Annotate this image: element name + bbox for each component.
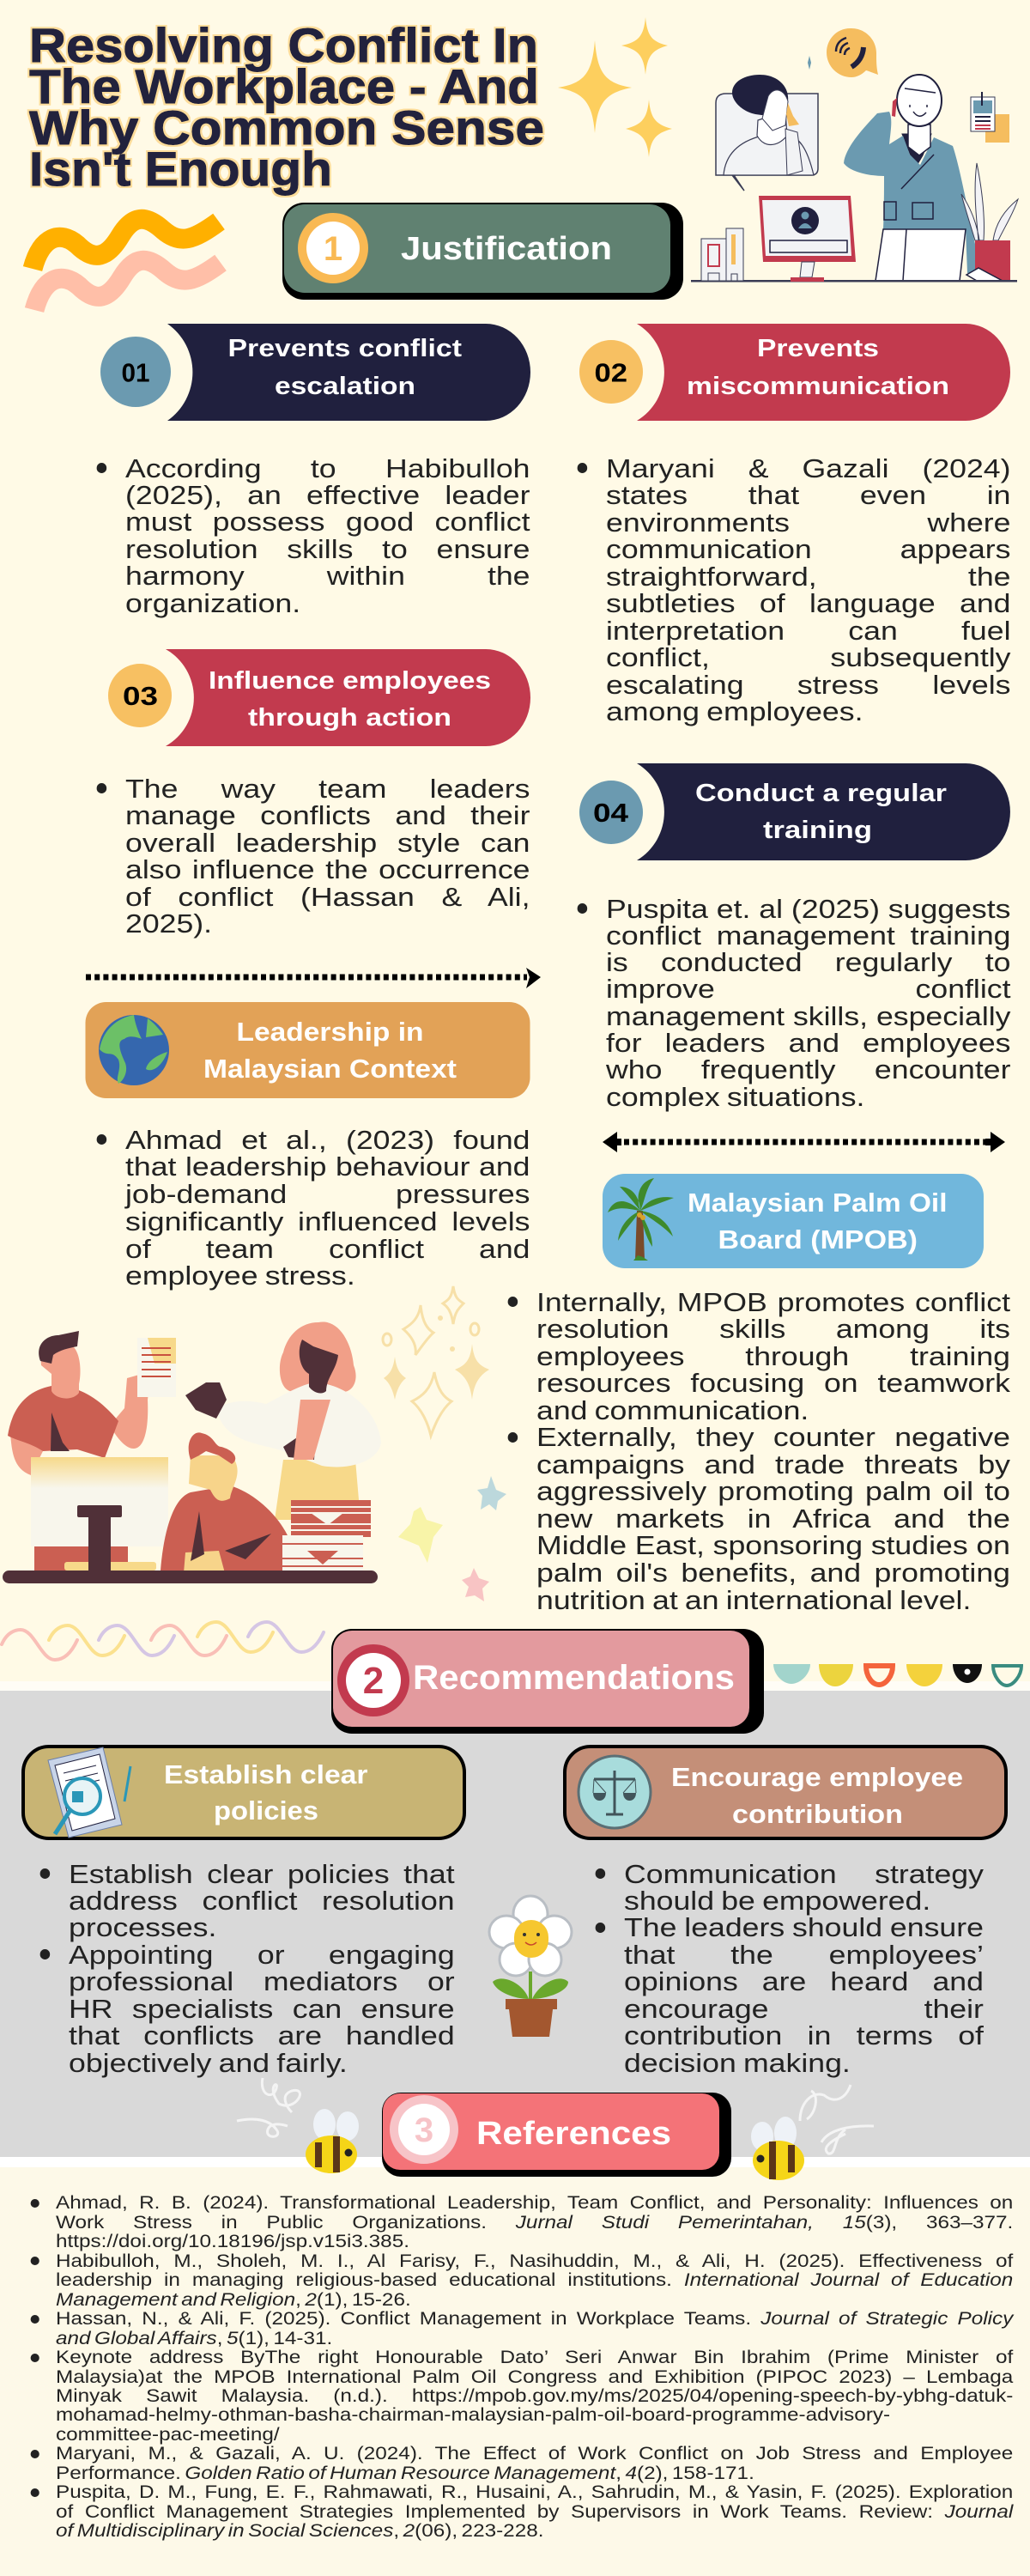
text: MPOB bullets: Externally, they counter negative — [536, 1422, 1010, 1452]
section button: Recommendations — [331, 1629, 764, 1734]
text: MPOB bullets: resources focusing on teamwork — [536, 1368, 1010, 1398]
text: MPOB bullets: employees through training — [536, 1341, 1010, 1371]
text: policies bullets: objectively and fairly. — [69, 2048, 348, 2078]
text: MPOB bullets: palm oil's benefits, and promoting — [536, 1558, 1010, 1588]
text: policies bullets: professional mediators or — [69, 1966, 455, 1996]
text: contribution bullets: contribution in terms of — [624, 2020, 984, 2050]
section button: References — [382, 2093, 731, 2177]
icon: number 3 badge — [390, 2095, 458, 2164]
text: contribution bullets: The leaders should ensure — [624, 1912, 984, 1942]
text: escalation bullet: According to Habibulloh — [125, 453, 530, 483]
text: MPOB bullets: resolution skills among its — [536, 1314, 1010, 1344]
text: training bullet: Puspita et. al (2025) suggests — [606, 893, 1010, 924]
arrow: dotted right arrow — [86, 968, 541, 988]
icon: potted plant — [961, 163, 1018, 281]
panel: Encourage employee contribution: contribution — [732, 1799, 903, 1829]
text: MPOB bullets — [508, 1286, 1010, 1615]
icon: orange and pink squiggles — [33, 219, 221, 310]
text: miscommunication bullet: interpretation can fuel — [606, 615, 1010, 646]
text: training bullet: who frequently encounter — [606, 1054, 1010, 1084]
panel: Malaysian Palm Oil Board: Board (MPOB) — [718, 1224, 918, 1255]
text: escalation bullet: organization. — [125, 588, 300, 618]
pill: 01 Prevents conflict escalation: escalation — [275, 373, 415, 400]
text: reference list: and Global Affairs, 5(1), 14-31. — [56, 2328, 332, 2348]
text: miscommunication bullet: communication appears — [606, 534, 1010, 564]
text: reference list: leadership in managing religious-based educational institutions. International Journal of Education — [56, 2269, 1013, 2290]
text: contribution bullets: decision making. — [624, 2048, 851, 2078]
icon: palm tree — [608, 1178, 674, 1261]
text: reference list — [31, 2192, 1015, 2541]
text: MPOB bullets: Middle East, sponsoring studies on — [536, 1530, 1010, 1560]
text: reference list: Puspita, D. M., Fung, E. F., Rahmawati, R., Husaini, A., Sahrudin, M., & Yasin, F. (2025). Exploration — [56, 2482, 1013, 2502]
text: Malaysian context bullet — [96, 1125, 530, 1291]
text: Malaysian context bullet: of team conflict and — [125, 1234, 530, 1264]
icon: left bee with scribbles — [237, 2078, 359, 2173]
text: reference list: of Conflict Management Strategies Implemented by Supervisors in Work Teams. Review: Journal — [56, 2501, 1013, 2522]
title: Isn't Enough — [29, 142, 332, 196]
panel: Leadership in Malaysian Context — [86, 1002, 530, 1098]
section button: References: References — [476, 2116, 671, 2152]
text: influence bullet: The way team leaders — [125, 773, 530, 804]
text: escalation bullet: harmony within the — [125, 561, 530, 591]
illustration: two people on a phone call — [716, 28, 1018, 281]
text: training bullet: management skills, especially — [606, 1001, 1010, 1031]
text: training bullet: complex situations. — [606, 1082, 864, 1112]
text: miscommunication bullet: environments where — [606, 507, 1010, 538]
pill: 04 Conduct a regular training: training — [763, 817, 872, 844]
text: reference list: Hassan, N., & Ali, F. (2025). Conflict Management in Workplace Teams. Journal of Strategic Policy — [56, 2308, 1013, 2329]
text: training bullet: improve conflict — [606, 974, 1010, 1004]
pill: 01 Prevents conflict escalation — [100, 324, 530, 421]
text: escalation bullet — [96, 453, 530, 618]
icon: clipboard with magnifier — [48, 1747, 130, 1838]
text: policies bullets: that conflicts are handled — [69, 2020, 455, 2050]
text: reference list: Maryani, M., & Gazali, A. U. (2024). The Effect of Work Conflict on Job Stress and Employee — [56, 2443, 1013, 2464]
icon: row of coloured bowls — [773, 1664, 1021, 1686]
text: miscommunication bullet: conflict, subsequently — [606, 642, 1010, 672]
text: reference list: Minyak Sawit Malaysia. (n.d.). https://mpob.gov.my/ms/2025/04/opening-speech-by-ybhg-datuk- — [56, 2385, 1013, 2406]
pill: 01 Prevents conflict escalation: 01 — [122, 357, 149, 388]
pill: 04 Conduct a regular training: 04 — [593, 798, 629, 828]
pill: 03 Influence employees through action: 03 — [123, 681, 158, 711]
text: contribution bullets: encourage their — [624, 1994, 984, 2024]
seated man — [161, 1432, 292, 1573]
illustration: desk with monitor and books — [691, 196, 1017, 282]
text: influence bullet: manage conflicts and their — [125, 800, 530, 830]
text: reference list: Malaysia)at the MPOB International Palm Oil Congress and Exhibition (PIPOC 2023) – Lembaga — [56, 2366, 1013, 2387]
text: contribution bullets: opinions are heard and — [624, 1966, 984, 1996]
pill: 04 Conduct a regular training — [579, 763, 1010, 860]
panel: Encourage employee contribution — [565, 1747, 1006, 1838]
text: policies bullets: HR specialists can ensure — [69, 1994, 455, 2024]
text: influence bullet: of conflict (Hassan & Ali, — [125, 882, 530, 912]
pill: 02 Prevents miscommunication: Prevents — [757, 335, 879, 362]
text: policies bullets: address conflict resolution — [69, 1886, 455, 1916]
stacked books — [282, 1500, 371, 1572]
pill: 02 Prevents miscommunication: 02 — [594, 357, 627, 388]
text: miscommunication bullet — [577, 453, 1011, 726]
text: reference list: Habibulloh, M., Sholeh, M. I., Al Farisy, F., Nasihuddin, M., & Ali, H. (2025). Effectiveness of — [56, 2251, 1013, 2271]
panel: Establish clear policies — [23, 1747, 464, 1838]
text: reference list: Work Stress in Public Organizations. Jurnal Studi Pemerintahan, 15(3), 363–377. — [56, 2212, 1013, 2233]
panel: Leadership in Malaysian Context: Leadership in — [237, 1017, 424, 1047]
icon: globe — [99, 1015, 169, 1085]
text: training bullet: for leaders and employees — [606, 1028, 1010, 1058]
icon: scales of justice — [579, 1756, 651, 1828]
icon: pale sparkles and stars — [383, 1286, 506, 1601]
text: MPOB bullets: aggressively promoting palm oil to — [536, 1476, 1010, 1506]
text: reference list: Performance. Golden Ratio of Human Resource Management, 4(2), 158-171. — [56, 2463, 754, 2483]
text: MPOB bullets: campaigns and trade threats by — [536, 1449, 1010, 1479]
text: miscommunication bullet: straightforward, the — [606, 562, 1010, 591]
panel: Malaysian Palm Oil Board — [603, 1174, 984, 1268]
text: reference list: mohamad-helmy-othman-basha-chairman-malaysian-palm-oil-board-programme-advisory- — [56, 2404, 890, 2425]
pill: 02 Prevents miscommunication: miscommunication — [687, 373, 949, 400]
text: policies bullets: Appointing or engaging — [69, 1940, 455, 1970]
panel: Establish clear policies: policies — [214, 1795, 318, 1826]
text: reference list: Keynote address ByThe right Honourable Dato’ Seri Anwar Bin Ibrahim (Prime Minister of — [56, 2347, 1013, 2367]
text: escalation bullet: must possess good conflict — [125, 507, 530, 537]
icon: number 1 badge: 1 — [324, 230, 342, 268]
title: Resolving Conflict In — [29, 18, 538, 72]
icon: smiling potted flower — [489, 1896, 572, 2037]
pill: 03 Influence employees through action: through action — [248, 704, 451, 732]
man with paper — [8, 1331, 176, 1475]
text: contribution bullets: that the employees’ — [624, 1940, 984, 1970]
text: reference list: committee-pac-meeting/ — [56, 2424, 280, 2445]
arrow: dotted double-headed arrow — [603, 1132, 1005, 1152]
text: policies bullets: processes. — [69, 1912, 216, 1942]
text: training bullet: is conducted regularly to — [606, 947, 1010, 977]
text: contribution bullets: Communication strategy — [624, 1858, 984, 1889]
panel: Leadership in Malaysian Context: Malaysian Context — [203, 1054, 457, 1084]
text: policies bullets — [39, 1858, 455, 2078]
text: escalation bullet: resolution skills to ensure — [125, 534, 530, 564]
text: MPOB bullets: new markets in Africa and the — [536, 1504, 1010, 1534]
text: policies bullets: Establish clear policies that — [69, 1858, 455, 1889]
icon: number 2 badge: 2 — [363, 1660, 384, 1702]
text: MPOB bullets: and communication. — [536, 1395, 809, 1425]
text: influence bullet — [96, 773, 530, 939]
text: reference list: of Multidisciplinary in Social Sciences, 2(06), 223-228. — [56, 2520, 543, 2541]
title: The Workplace - And — [29, 59, 539, 113]
pill: 01 Prevents conflict escalation: Prevents conflict — [228, 335, 462, 362]
text: miscommunication bullet: subtleties of language and — [606, 588, 1010, 618]
illustration: colleagues in conflict at a desk — [3, 1321, 381, 1583]
text: Malaysian context bullet: employee stress. — [125, 1261, 354, 1291]
pill: 03 Influence employees through action: Influence employees — [209, 667, 491, 695]
pill: 03 Influence employees through action — [108, 649, 530, 746]
text: MPOB bullets: nutrition at an international level. — [536, 1585, 971, 1615]
text: reference list: https://doi.org/10.18196/jsp.v15i3.385. — [56, 2231, 409, 2251]
text: Malaysian context bullet: that leadership behaviour and — [125, 1151, 530, 1182]
panel: Establish clear policies: Establish clear — [164, 1759, 367, 1789]
monitor — [31, 1457, 168, 1571]
panel: Malaysian Palm Oil Board: Malaysian Palm Oil — [688, 1188, 948, 1218]
text: miscommunication bullet: escalating stress levels — [606, 670, 1010, 699]
text: Malaysian context bullet: significantly influenced levels — [125, 1206, 530, 1236]
woman gesturing — [185, 1321, 381, 1520]
section button: Recommendations: Recommendations — [413, 1659, 735, 1697]
decorative pastel wave — [2, 1622, 324, 1660]
panel: Encourage employee contribution: Encourage employee — [671, 1762, 963, 1792]
icon: number 1 badge — [298, 213, 368, 283]
text: contribution bullets: should be empowered. — [624, 1886, 930, 1916]
text: escalation bullet: (2025), an effective leader — [125, 480, 530, 510]
text: MPOB bullets: Internally, MPOB promotes conflict — [536, 1286, 1010, 1317]
icon: gold sparkles — [558, 17, 672, 157]
text: miscommunication bullet: among employees. — [606, 696, 863, 726]
text: miscommunication bullet: Maryani & Gazali (2024) — [606, 453, 1010, 483]
text: reference list: Ahmad, R. B. (2024). Transformational Leadership, Team Conflict, and Personality: Influences on — [56, 2192, 1013, 2213]
text: reference list: Management and Religion, 2(1), 15-26. — [56, 2289, 411, 2310]
text: training bullet — [577, 893, 1011, 1112]
text: training bullet: conflict management training — [606, 920, 1010, 951]
text: influence bullet: overall leadership style can — [125, 828, 530, 858]
text: influence bullet: also influence the occurrence — [125, 854, 530, 884]
text: Malaysian context bullet: job-demand pressures — [125, 1179, 530, 1209]
text: Malaysian context bullet: Ahmad et al., (2023) found — [125, 1125, 530, 1154]
pill: 04 Conduct a regular training: Conduct a regular — [695, 780, 947, 807]
title — [29, 18, 544, 196]
icon: right bee with scribbles — [751, 2085, 874, 2180]
icon: number 3 badge: 3 — [415, 2111, 433, 2149]
section button: Justification: Justification — [401, 231, 612, 267]
text: influence bullet: 2025). — [125, 908, 212, 939]
title: Why Common Sense — [29, 100, 544, 155]
text: miscommunication bullet: states that even in — [606, 480, 1010, 510]
icon: number 2 badge — [337, 1644, 409, 1716]
text: contribution bullets — [596, 1858, 984, 2078]
pill: 02 Prevents miscommunication — [579, 324, 1010, 421]
section button: Justification — [282, 203, 683, 300]
